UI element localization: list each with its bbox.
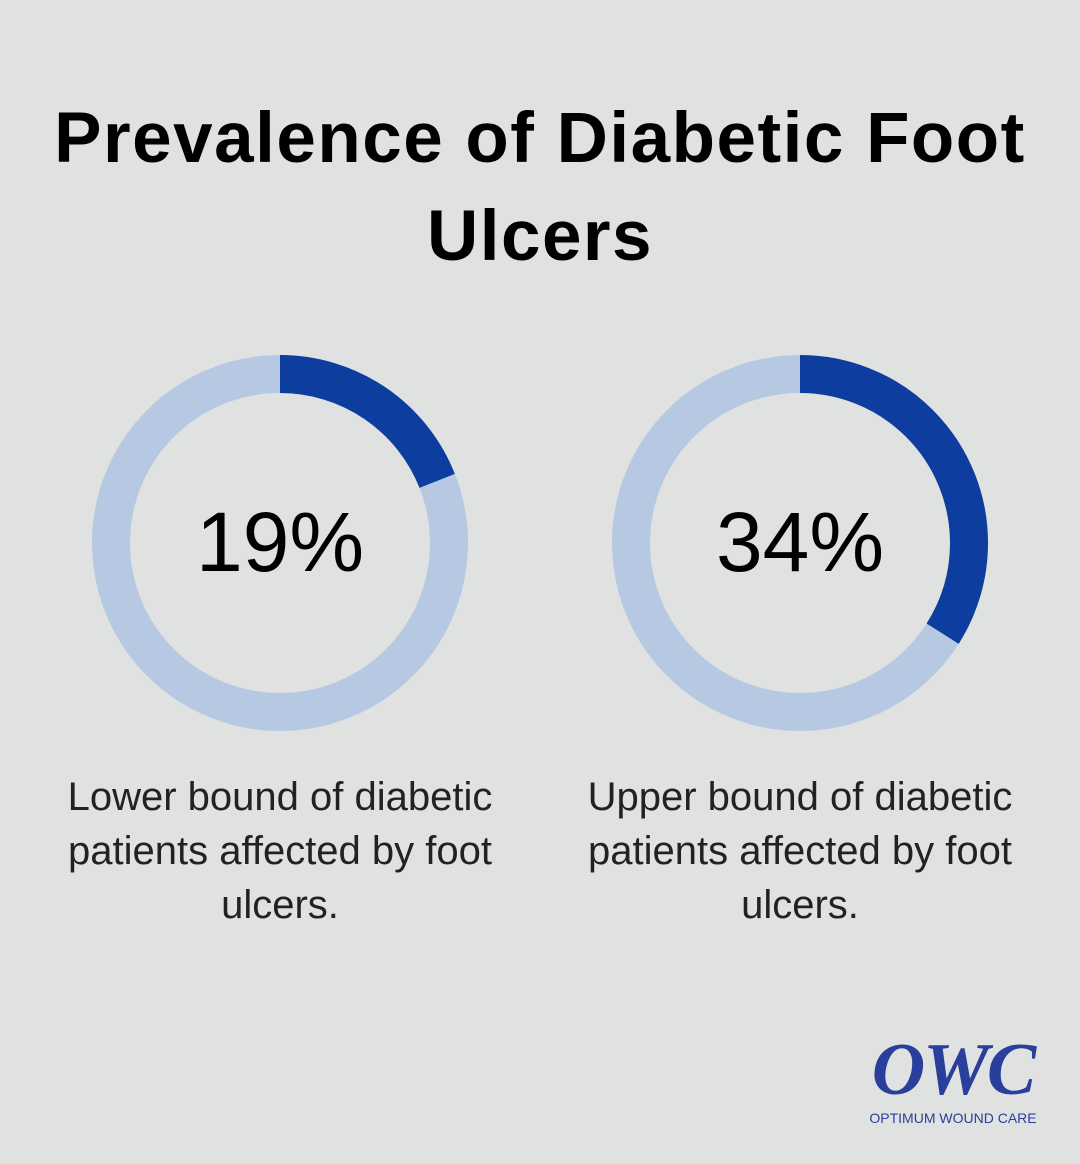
title: Prevalence of Diabetic Foot xyxy=(54,99,1026,178)
logo: OWC xyxy=(872,1029,1034,1111)
title: Ulcers xyxy=(427,197,653,276)
title xyxy=(54,99,1026,276)
donut: 34%: 34% xyxy=(716,495,884,589)
caption: upper bound: Upper bound of diabetic patients affected by foot ulcers. xyxy=(588,775,1012,927)
donut: 34% xyxy=(612,355,988,731)
logo: OPTIMUM WOUND CARE xyxy=(869,1110,1037,1126)
caption: lower bound: Lower bound of diabetic patients affected by foot ulcers. xyxy=(68,775,492,927)
donut: 19%: 19% xyxy=(196,495,364,589)
donut: 19% xyxy=(92,355,468,731)
